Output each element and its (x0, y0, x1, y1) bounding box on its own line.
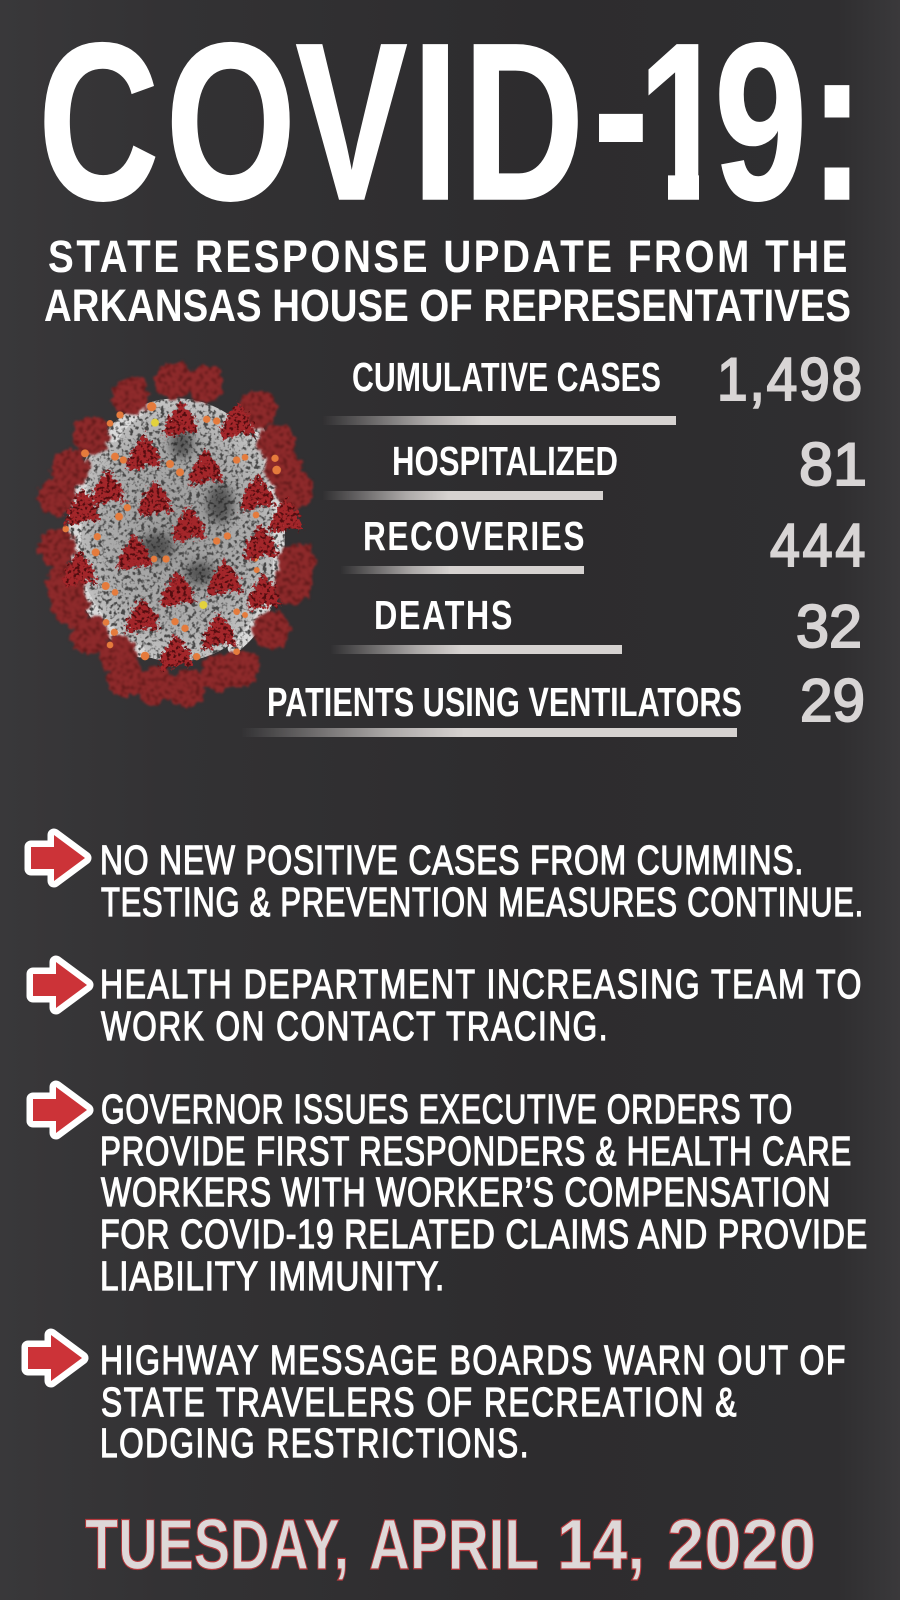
stat: hospitalized: HOSPITALIZED (392, 438, 618, 484)
date footer: APRIL (369, 1506, 539, 1585)
virus outer spikes (37, 362, 316, 708)
date footer: 14, (557, 1506, 645, 1585)
stat: patients using ventilators: PATIENTS USING VENTILATORS (267, 679, 742, 725)
bullet text (100, 837, 864, 925)
bullet: highway message boards (28, 1335, 847, 1466)
title: 1 (638, 0, 728, 247)
bullet text: WORK ON CONTACT TRACING. (101, 1003, 609, 1049)
stat: recoveries: 444 (770, 512, 868, 579)
virus dark patches (140, 428, 233, 585)
stat: cumulative cases: CUMULATIVE CASES (352, 354, 661, 400)
date footer (85, 1506, 816, 1585)
bullet: Cummins (31, 835, 864, 925)
stat: deaths: 32 (796, 593, 862, 660)
stat: cumulative cases: 1,498 (717, 346, 864, 413)
title (44, 42, 850, 202)
stat: hospitalized: 81 (799, 431, 867, 498)
stat: hospitalized (322, 431, 867, 500)
virus body (68, 398, 285, 662)
bullet text (100, 1337, 847, 1466)
bullet text (100, 961, 863, 1049)
arrow icon (31, 835, 85, 881)
virus orange dots (62, 402, 281, 660)
bullet: executive orders (33, 1086, 868, 1299)
bullet: contact tracing (33, 961, 863, 1049)
virus front spikes (62, 401, 303, 670)
arrow icon (33, 962, 87, 1008)
arrow icon (28, 1335, 82, 1381)
date footer: 2020 (667, 1506, 816, 1585)
bullet text: STATE TRAVELERS OF RECREATION & (101, 1379, 738, 1425)
stat: recoveries: RECOVERIES (363, 513, 586, 559)
subtitle (44, 231, 851, 331)
arrow icon (33, 1087, 87, 1133)
stat: cumulative cases (322, 346, 864, 425)
stat: deaths (330, 592, 862, 660)
title: 9: (714, 0, 865, 247)
bullet text (100, 1086, 868, 1299)
stat: deaths: DEATHS (374, 592, 514, 638)
virus yellow dots (151, 419, 207, 609)
stat: recoveries (340, 512, 868, 579)
stat: patients using ventilators: 29 (800, 667, 865, 734)
bullet text: LIABILITY IMMUNITY. (100, 1253, 445, 1299)
stat: patients using ventilators (240, 667, 865, 737)
bullet text: LODGING RESTRICTIONS. (100, 1420, 530, 1466)
date footer: TUESDAY, (85, 1506, 349, 1585)
icon: coronavirus illustration (37, 362, 316, 708)
